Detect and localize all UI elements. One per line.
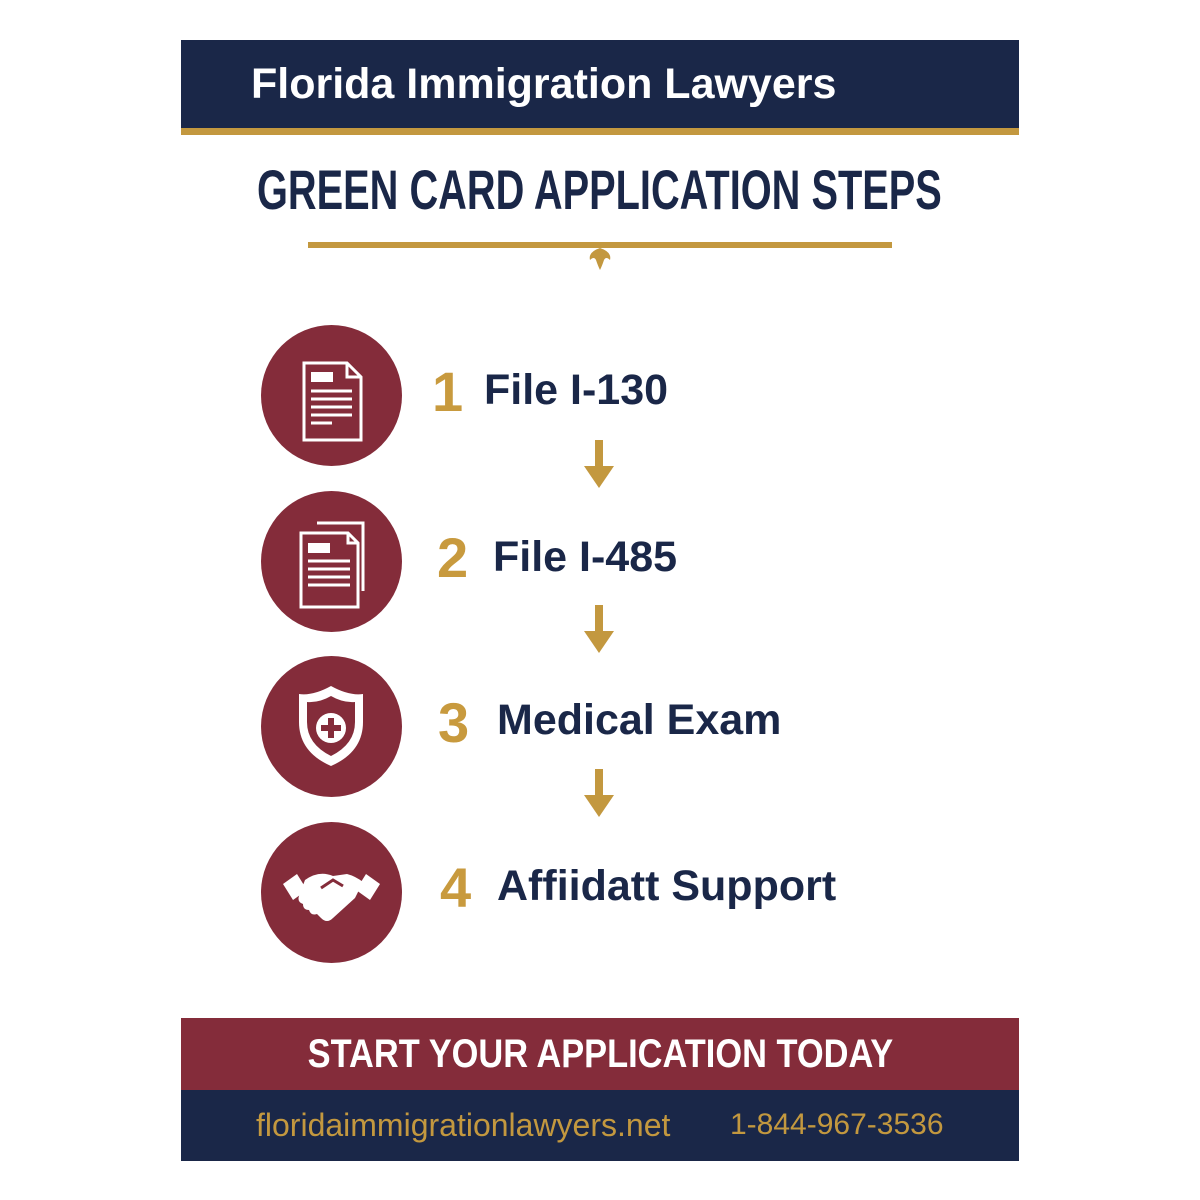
arrow 3 <box>584 769 614 817</box>
step 3 number: 3 <box>438 691 469 754</box>
phone: 1-844-967-3536 <box>730 1108 944 1141</box>
step 1 icon <box>261 325 402 466</box>
step 4 icon <box>261 822 402 963</box>
step 4 label: Affiidatt Support <box>497 862 836 910</box>
step 2 label: File I-485 <box>493 533 677 581</box>
title: GREEN CARD APPLICATION STEPS <box>257 158 942 221</box>
step 1 label: File I-130 <box>484 366 668 414</box>
step 1 number: 1 <box>432 360 463 423</box>
footer contact bar <box>181 1090 1019 1161</box>
arrow 2 <box>584 605 614 653</box>
step 4 number: 4 <box>440 856 471 919</box>
header text: Florida Immigration Lawyers <box>251 60 836 108</box>
CTA text: START YOUR APPLICATION TODAY <box>307 1032 893 1076</box>
website: floridaimmigrationlawyers.net <box>256 1107 670 1143</box>
step 2 number: 2 <box>437 526 468 589</box>
arrow 1 <box>584 440 614 488</box>
CTA bar <box>181 1018 1019 1090</box>
step 3 label: Medical Exam <box>497 696 781 744</box>
step 2 icon <box>261 491 402 632</box>
title underline ornament <box>308 242 892 270</box>
step 3 icon <box>261 656 402 797</box>
gold strip <box>181 128 1019 135</box>
header bar <box>181 40 1019 128</box>
